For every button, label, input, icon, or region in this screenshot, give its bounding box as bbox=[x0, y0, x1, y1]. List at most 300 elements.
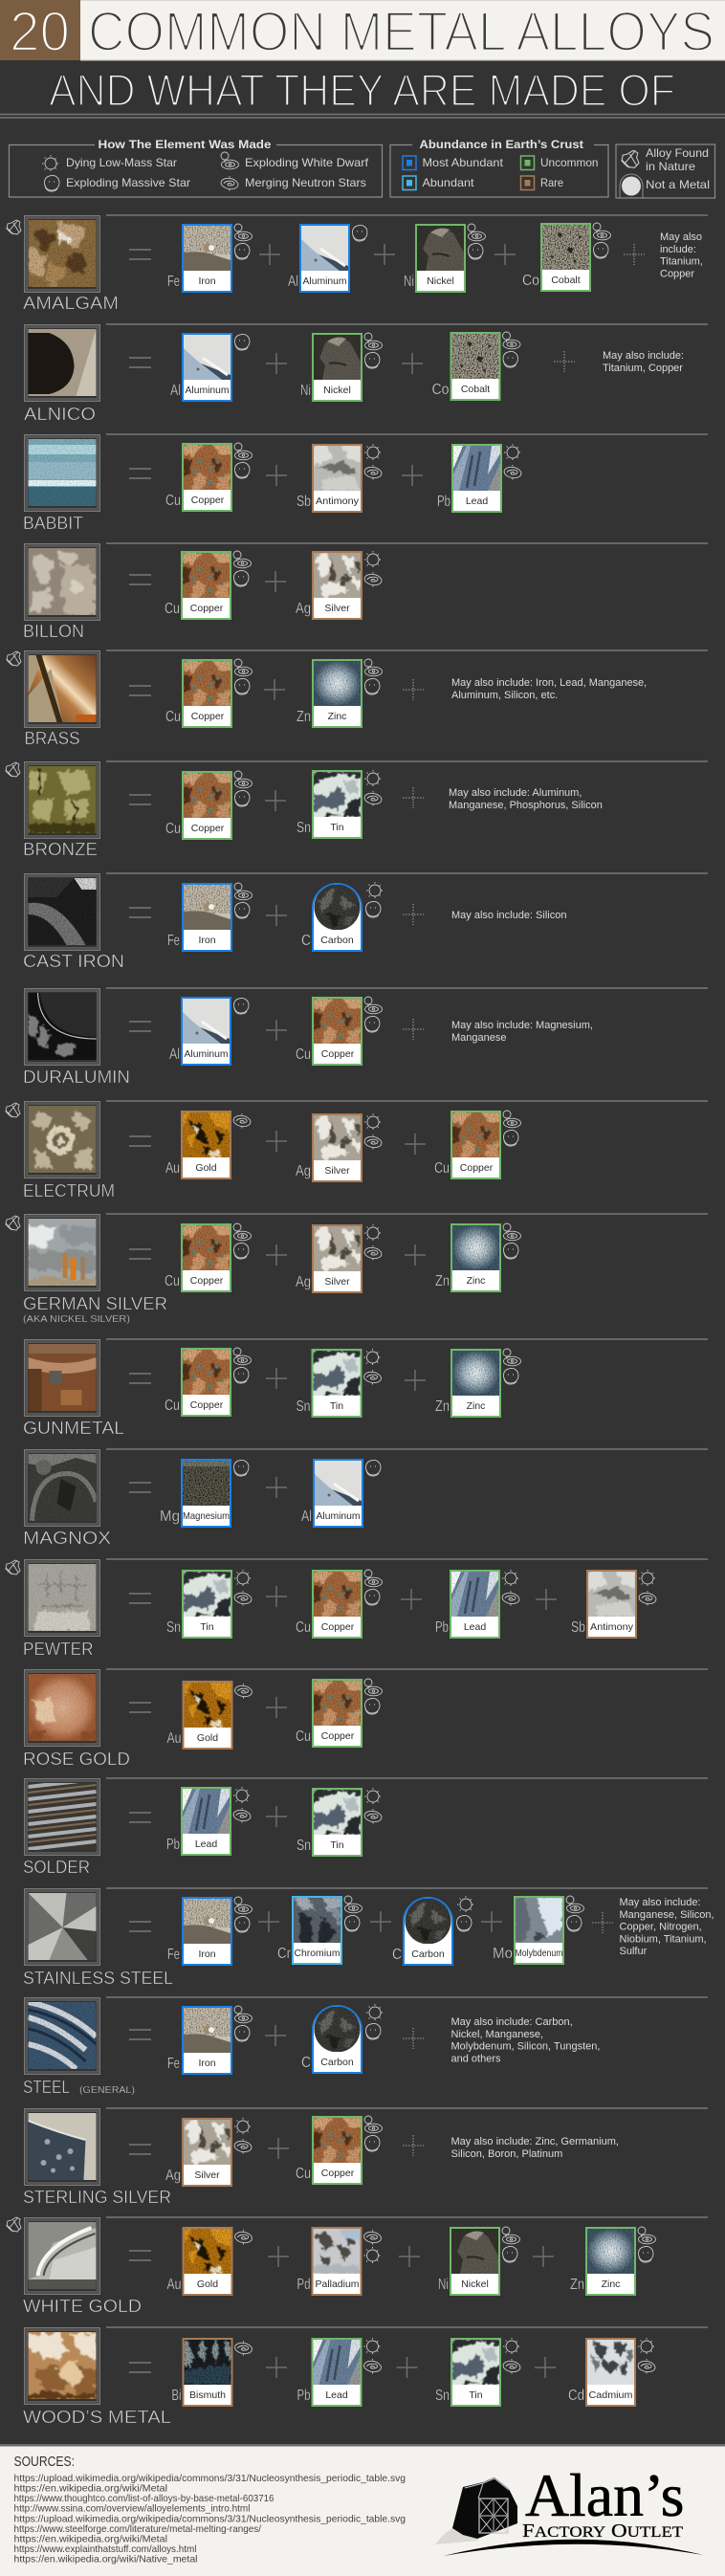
alloy photo: brass bbox=[25, 651, 99, 727]
element: tin: Tin bbox=[200, 1621, 214, 1633]
may also include: Sulfur bbox=[620, 1946, 648, 1957]
element: copper: Copper bbox=[190, 1275, 224, 1287]
alloy name: DURALUMIN bbox=[23, 1067, 130, 1087]
plus bbox=[265, 2025, 286, 2046]
element: copper: Cu bbox=[296, 1619, 311, 1636]
icon: found in nature bbox=[7, 2217, 21, 2232]
icon: found in nature bbox=[6, 762, 20, 777]
element: cadmium: Cd bbox=[568, 2388, 584, 2404]
element: antimony: Antimony bbox=[316, 495, 360, 507]
element: aluminum: Aluminum bbox=[184, 1048, 229, 1060]
element: aluminum: Al bbox=[301, 1508, 312, 1525]
element: gold bbox=[166, 1682, 253, 1749]
sources list: https://en.wikipedia.org/wiki/Native_metal bbox=[13, 2554, 197, 2565]
element: zinc bbox=[570, 2227, 656, 2295]
element: lead: Lead bbox=[464, 1621, 486, 1633]
element: nickel bbox=[404, 224, 486, 292]
plus bbox=[405, 1244, 426, 1266]
sources list: https://en.wikipedia.org/wiki/Metal bbox=[13, 2483, 167, 2495]
sources list: http://www.ssina.com/overview/alloyelements_intro.html bbox=[13, 2502, 251, 2514]
element: molybdenum bbox=[493, 1896, 583, 1964]
title banner: 20 bbox=[10, 1, 70, 63]
element: copper bbox=[165, 1223, 251, 1291]
element: nickel bbox=[300, 333, 383, 401]
element: tin: Sn bbox=[297, 1398, 310, 1415]
element: aluminum: Al bbox=[170, 383, 181, 399]
element: tin: Sn bbox=[435, 2388, 450, 2404]
row: Babbit bbox=[23, 434, 708, 533]
alloy name: CAST IRON bbox=[23, 951, 124, 971]
legend: abundance in earth's crust: Most Abundant bbox=[423, 156, 504, 169]
sources list bbox=[13, 2473, 406, 2565]
element: antimony: Sb bbox=[297, 494, 311, 510]
element: aluminum bbox=[169, 998, 249, 1065]
legend: how the element was made: Dying Low-Mass Star bbox=[66, 156, 177, 169]
element: bismuth bbox=[172, 2339, 253, 2406]
element: antimony bbox=[297, 444, 383, 512]
may also include: May also include: Carbon, bbox=[451, 2016, 573, 2028]
equals bbox=[129, 2251, 151, 2260]
equals bbox=[129, 1594, 151, 1603]
may also include: Nickel, Manganese, bbox=[451, 2029, 543, 2040]
element: copper: Cu bbox=[434, 1160, 450, 1177]
element: iron bbox=[167, 2006, 253, 2074]
element: silver bbox=[296, 551, 383, 619]
element: gold bbox=[166, 2228, 253, 2295]
row: German Silver bbox=[6, 1214, 708, 1325]
alloy name: STAINLESS STEEL bbox=[23, 1968, 173, 1988]
equals bbox=[129, 1813, 151, 1822]
element: lead: Lead bbox=[195, 1838, 217, 1850]
alloy photo: white gold bbox=[25, 2218, 99, 2294]
element: cobalt bbox=[522, 223, 610, 291]
dotted plus bbox=[403, 1019, 424, 1040]
element: chromium: Cr bbox=[277, 1946, 292, 1962]
element: carbon: Carbon bbox=[320, 2057, 354, 2068]
element: silver bbox=[296, 1113, 383, 1181]
dotted plus bbox=[403, 679, 424, 700]
legend: alloy found in nature, not a metal bbox=[616, 144, 715, 198]
equals bbox=[129, 469, 151, 478]
alloy name: PEWTER bbox=[23, 1639, 94, 1659]
equals bbox=[129, 575, 151, 584]
plus bbox=[264, 679, 285, 700]
element: carbon bbox=[301, 2004, 384, 2073]
alloy name: ELECTRUM bbox=[23, 1180, 115, 1200]
element: silver: Silver bbox=[324, 1276, 350, 1288]
element: lead: Pb bbox=[437, 494, 450, 510]
sources list: https://www.explainthatstuff.com/alloys.html bbox=[13, 2543, 197, 2555]
plus bbox=[266, 1477, 287, 1498]
equals bbox=[129, 2145, 151, 2154]
sources heading: SOURCES: bbox=[13, 2455, 75, 2470]
legend: abundance in earth's crust: Rare bbox=[540, 176, 563, 189]
row: Stainless Steel bbox=[23, 1888, 714, 1988]
sources list: https://www.steelforge.com/literature/metal-melting-ranges/ bbox=[13, 2523, 261, 2535]
element: lead bbox=[297, 2338, 382, 2406]
alloy photo: electrum bbox=[25, 1102, 99, 1178]
element: iron: Iron bbox=[198, 2058, 216, 2069]
legend: abundance in earth's crust: Abundant bbox=[423, 176, 474, 189]
legend: how the element was made bbox=[10, 140, 383, 197]
alloy photo: gunmetal bbox=[25, 1340, 99, 1416]
equals bbox=[129, 250, 151, 259]
sources list: https://www.thoughtco.com/list-of-alloys-by-base-metal-603716 bbox=[13, 2493, 275, 2504]
may also include: May also include: Magnesium, bbox=[451, 1020, 593, 1031]
subtitle: AND WHAT THEY ARE MADE OF bbox=[49, 65, 675, 115]
element: tin bbox=[297, 770, 383, 838]
icon: found in nature bbox=[7, 651, 21, 666]
element: antimony: Antimony bbox=[590, 1621, 634, 1633]
dotted plus bbox=[554, 351, 575, 372]
element: lead bbox=[166, 1787, 252, 1855]
element: iron bbox=[167, 883, 253, 951]
element: copper bbox=[165, 551, 251, 619]
plus bbox=[265, 790, 286, 811]
row: Electrum bbox=[6, 1101, 708, 1200]
element: iron bbox=[167, 1897, 253, 1965]
element: copper bbox=[296, 1570, 383, 1638]
element: lead: Pb bbox=[435, 1619, 449, 1636]
element: tin: Tin bbox=[330, 1400, 343, 1412]
row: Billon bbox=[23, 543, 708, 641]
may also include: Silicon, Boron, Platinum bbox=[451, 2148, 562, 2160]
plus bbox=[405, 1134, 426, 1155]
element: tin bbox=[435, 2338, 521, 2406]
alloy subtitle: (AKA NICKEL SILVER) bbox=[23, 1313, 130, 1325]
may also include: include: bbox=[660, 244, 696, 255]
element: lead: Lead bbox=[466, 495, 488, 507]
element: iron: Iron bbox=[198, 1949, 216, 1960]
plus bbox=[266, 465, 287, 486]
element: cobalt: Co bbox=[522, 273, 539, 289]
plus bbox=[374, 244, 395, 265]
alloy photo: pewter bbox=[25, 1560, 99, 1636]
element: nickel: Nickel bbox=[323, 385, 351, 396]
element: zinc: Zn bbox=[570, 2277, 584, 2293]
alloy name: WOOD’S METAL bbox=[23, 2407, 171, 2427]
element: copper: Copper bbox=[321, 1621, 355, 1633]
dotted plus bbox=[403, 787, 424, 808]
alloy photo: stainless steel bbox=[25, 1889, 99, 1965]
element: gold: Gold bbox=[197, 1732, 218, 1744]
row: Brass bbox=[7, 650, 708, 748]
element: antimony bbox=[571, 1570, 657, 1638]
element: copper bbox=[165, 659, 253, 727]
element: iron: Iron bbox=[198, 935, 216, 946]
alloy name: STEEL bbox=[23, 2077, 70, 2097]
plus bbox=[265, 571, 286, 592]
element: silver: Silver bbox=[194, 2169, 220, 2181]
element: lead bbox=[435, 1570, 520, 1638]
plus bbox=[266, 905, 287, 926]
element: copper: Copper bbox=[460, 1162, 494, 1174]
element: iron bbox=[167, 224, 253, 292]
may also include: Aluminum, Silicon, etc. bbox=[451, 690, 558, 701]
alloy name: MAGNOX bbox=[23, 1528, 111, 1548]
element: magnesium: Mg bbox=[160, 1508, 180, 1525]
may also include: May also include: bbox=[620, 1897, 700, 1908]
plus bbox=[370, 1911, 391, 1932]
swoosh bbox=[444, 2540, 703, 2556]
row: Sterling Silver bbox=[23, 2108, 708, 2207]
row: Rose Gold bbox=[23, 1669, 708, 1769]
plus bbox=[399, 2246, 420, 2267]
element: chromium bbox=[277, 1896, 362, 1964]
plus bbox=[402, 465, 423, 486]
element: copper: Cu bbox=[296, 2166, 311, 2182]
row: Steel bbox=[23, 1997, 708, 2097]
equals bbox=[129, 686, 151, 695]
element: lead bbox=[437, 444, 522, 512]
element: zinc bbox=[435, 1223, 520, 1291]
element: chromium: Chromium bbox=[295, 1948, 341, 1959]
element: zinc: Zinc bbox=[467, 1400, 485, 1412]
plus bbox=[268, 2138, 289, 2159]
element: copper: Copper bbox=[321, 1730, 355, 1742]
row: Duralumin bbox=[23, 988, 708, 1087]
element: palladium: Palladium bbox=[316, 2279, 360, 2290]
element: iron: Fe bbox=[167, 274, 180, 290]
alloy photo: rose gold bbox=[25, 1670, 99, 1746]
sources list: https://upload.wikimedia.org/wikipedia/commons/3/31/Nucleosynthesis_periodic_table.svg bbox=[13, 2473, 406, 2484]
alloy photo: steel bbox=[25, 1998, 99, 2074]
element: aluminum: Aluminum bbox=[186, 385, 230, 396]
element: silver: Ag bbox=[296, 1274, 311, 1290]
element: lead: Pb bbox=[166, 1837, 180, 1853]
plus bbox=[396, 2357, 417, 2378]
equals bbox=[129, 1483, 151, 1492]
element: carbon: C bbox=[392, 1947, 402, 1963]
plus bbox=[266, 1131, 287, 1152]
element: tin bbox=[166, 1570, 253, 1638]
plus bbox=[536, 1589, 557, 1610]
alloy photo: billon bbox=[25, 544, 99, 620]
legend: abundance in earth's crust: Abundance in Earth’s Crust bbox=[419, 140, 583, 151]
element: bismuth: Bismuth bbox=[189, 2389, 226, 2401]
element: bismuth: Bi bbox=[172, 2388, 182, 2404]
element: magnesium: Magnesium bbox=[183, 1510, 230, 1522]
may also include: Copper bbox=[660, 268, 694, 279]
plus bbox=[266, 1244, 287, 1266]
dotted plus bbox=[403, 2135, 424, 2156]
equals bbox=[129, 1022, 151, 1031]
element: tin: Sn bbox=[297, 1838, 311, 1854]
alloy photo: bronze bbox=[25, 762, 99, 838]
equals bbox=[129, 1374, 151, 1383]
alloy photo: magnox bbox=[25, 1450, 99, 1526]
element: gold bbox=[165, 1112, 252, 1178]
row: Bronze bbox=[6, 761, 708, 859]
element: carbon: C bbox=[301, 933, 311, 949]
alloy name: BILLON bbox=[23, 621, 84, 641]
plus bbox=[266, 1697, 287, 1718]
legend: how the element was made: Merging Neutron Stars bbox=[245, 176, 366, 189]
element: zinc bbox=[297, 659, 383, 727]
legend: abundance in earth's crust: Uncommon bbox=[540, 156, 599, 169]
plus bbox=[266, 1586, 287, 1607]
legend: how the element was made: Exploding Massive Star bbox=[66, 176, 190, 189]
footer panel bbox=[0, 2444, 725, 2576]
element: tin: Sn bbox=[166, 1619, 181, 1636]
element: gold: Au bbox=[165, 1160, 180, 1177]
may also include: May also include: bbox=[603, 350, 684, 362]
legend: alloy found in nature, not a metal: Not a Metal bbox=[646, 178, 710, 191]
may also include: Manganese, Phosphorus, Silicon bbox=[449, 800, 603, 811]
alloy photo: babbit bbox=[25, 435, 99, 511]
element: cobalt: Cobalt bbox=[461, 384, 490, 395]
element: aluminum: Aluminum bbox=[302, 275, 347, 287]
may also include: Copper, Nitrogen, bbox=[620, 1922, 702, 1933]
row: Pewter bbox=[6, 1559, 708, 1659]
element: tin: Tin bbox=[330, 1839, 344, 1851]
element: zinc: Zinc bbox=[467, 1275, 485, 1287]
element: palladium: Pd bbox=[297, 2277, 310, 2293]
alloy photo: amalgam bbox=[25, 216, 99, 292]
element: zinc: Zinc bbox=[602, 2279, 620, 2290]
element: copper bbox=[296, 997, 383, 1065]
alloy name: BABBIT bbox=[23, 513, 83, 533]
equals bbox=[129, 1703, 151, 1712]
element: tin: Tin bbox=[469, 2389, 483, 2401]
alloy name: GUNMETAL bbox=[23, 1418, 124, 1438]
logo: Alan's Factory Outlet: FACTORY OUTLET bbox=[522, 2521, 683, 2542]
plus bbox=[266, 1368, 287, 1389]
element: iron: Fe bbox=[167, 2056, 180, 2072]
icon: found in nature bbox=[6, 1103, 20, 1117]
logo: Alan's Factory Outlet: Alan’s bbox=[525, 2462, 685, 2529]
row: Gunmetal bbox=[23, 1339, 708, 1438]
element: silver: Ag bbox=[296, 1163, 311, 1179]
element: iron: Iron bbox=[198, 275, 216, 287]
plus bbox=[401, 1589, 422, 1610]
element: carbon: C bbox=[301, 2055, 311, 2071]
element: gold: Au bbox=[166, 1730, 182, 1747]
element: copper: Cu bbox=[165, 1398, 180, 1414]
element: aluminum: Al bbox=[288, 274, 298, 290]
may also include: May also include: Aluminum, bbox=[449, 787, 582, 799]
element: iron: Fe bbox=[167, 933, 180, 949]
dotted plus bbox=[403, 904, 424, 925]
element: copper: Cu bbox=[165, 709, 181, 725]
plus bbox=[266, 353, 287, 374]
element: copper: Copper bbox=[190, 603, 224, 614]
element: copper: Copper bbox=[191, 823, 225, 834]
element: copper: Cu bbox=[165, 493, 181, 509]
element: aluminum: Al bbox=[169, 1046, 180, 1063]
equals bbox=[129, 1922, 151, 1931]
element: gold: Au bbox=[166, 2277, 182, 2293]
plus bbox=[405, 1370, 426, 1391]
double divider bbox=[0, 115, 725, 118]
alloy photo: alnico bbox=[25, 325, 99, 401]
element: zinc: Zinc bbox=[328, 711, 346, 722]
plus bbox=[258, 1911, 279, 1932]
legend: how the element was made: How The Element Was Made bbox=[98, 140, 272, 151]
element: palladium bbox=[297, 2228, 382, 2295]
element: copper: Cu bbox=[165, 821, 181, 837]
plus bbox=[266, 1806, 287, 1827]
equals bbox=[129, 358, 151, 367]
element: copper: Cu bbox=[296, 1046, 311, 1063]
element: zinc: Zn bbox=[435, 1273, 450, 1289]
element: zinc bbox=[435, 1349, 520, 1417]
element: nickel: Ni bbox=[438, 2277, 449, 2293]
element: silver: Silver bbox=[324, 1165, 350, 1177]
element: lead: Pb bbox=[297, 2388, 311, 2404]
equals bbox=[129, 795, 151, 804]
plus bbox=[494, 244, 516, 265]
element: nickel: Nickel bbox=[461, 2279, 489, 2290]
element: molybdenum: Mo bbox=[493, 1946, 513, 1962]
element: gold: Gold bbox=[195, 1162, 217, 1174]
element: magnesium bbox=[160, 1460, 249, 1527]
row: White Gold bbox=[7, 2217, 708, 2316]
element: nickel: Ni bbox=[404, 274, 414, 290]
element: silver: Ag bbox=[165, 2168, 181, 2184]
element: silver: Silver bbox=[324, 603, 350, 614]
element: cadmium bbox=[568, 2338, 656, 2406]
legend: alloy found in nature, not a metal: in Nature bbox=[646, 160, 695, 173]
icon: found in nature bbox=[7, 220, 21, 234]
element: carbon: Carbon bbox=[411, 1949, 445, 1960]
equals bbox=[129, 1249, 151, 1259]
alloy name: ROSE GOLD bbox=[23, 1749, 130, 1769]
row: Cast Iron bbox=[23, 873, 708, 971]
element: copper: Copper bbox=[321, 2168, 355, 2179]
element: carbon: Carbon bbox=[320, 935, 354, 946]
element: copper bbox=[165, 443, 253, 511]
element: copper bbox=[165, 1348, 251, 1416]
element: antimony: Sb bbox=[571, 1619, 585, 1636]
element: zinc: Zn bbox=[297, 709, 311, 725]
element: tin bbox=[297, 1788, 383, 1856]
element: iron: Fe bbox=[167, 1947, 180, 1963]
plus bbox=[266, 2357, 287, 2378]
element: copper: Copper bbox=[191, 495, 225, 506]
element: zinc: Zn bbox=[435, 1398, 450, 1415]
plus bbox=[266, 1020, 287, 1041]
alloy subtitle: (GENERAL) bbox=[79, 2084, 135, 2096]
may also include: May also include: Zinc, Germanium, bbox=[451, 2136, 619, 2147]
sources list: https://upload.wikimedia.org/wikipedia/commons/3/31/Nucleosynthesis_periodic_table.svg bbox=[13, 2514, 406, 2525]
element: copper bbox=[165, 771, 253, 839]
element: silver bbox=[296, 1224, 383, 1292]
row: Solder bbox=[23, 1778, 708, 1877]
element: nickel: Nickel bbox=[427, 275, 454, 287]
legend: how the element was made: Exploding White Dwarf bbox=[245, 156, 369, 169]
element: copper: Copper bbox=[191, 711, 225, 722]
may also include: and others bbox=[451, 2053, 501, 2064]
may also include: Niobium, Titanium, bbox=[620, 1933, 707, 1945]
icon: found in nature bbox=[6, 1560, 20, 1574]
plus bbox=[259, 244, 280, 265]
alloy name: WHITE GOLD bbox=[23, 2296, 142, 2316]
may also include: Titanium, bbox=[660, 256, 703, 268]
element: aluminum bbox=[288, 225, 367, 292]
alloy name: BRASS bbox=[25, 728, 80, 748]
element: cobalt: Cobalt bbox=[551, 275, 581, 286]
may also include: Manganese, Silicon, bbox=[620, 1909, 714, 1921]
alloy name: SOLDER bbox=[23, 1857, 90, 1877]
may also include: May also include: Iron, Lead, Manganese, bbox=[451, 677, 647, 689]
element: lead: Lead bbox=[325, 2389, 348, 2401]
row: Magnox bbox=[23, 1449, 708, 1548]
may also include: Titanium, Copper bbox=[603, 363, 683, 374]
element: aluminum: Aluminum bbox=[316, 1510, 361, 1522]
alloy name: BRONZE bbox=[23, 839, 98, 859]
alloy name: GERMAN SILVER bbox=[23, 1293, 167, 1313]
